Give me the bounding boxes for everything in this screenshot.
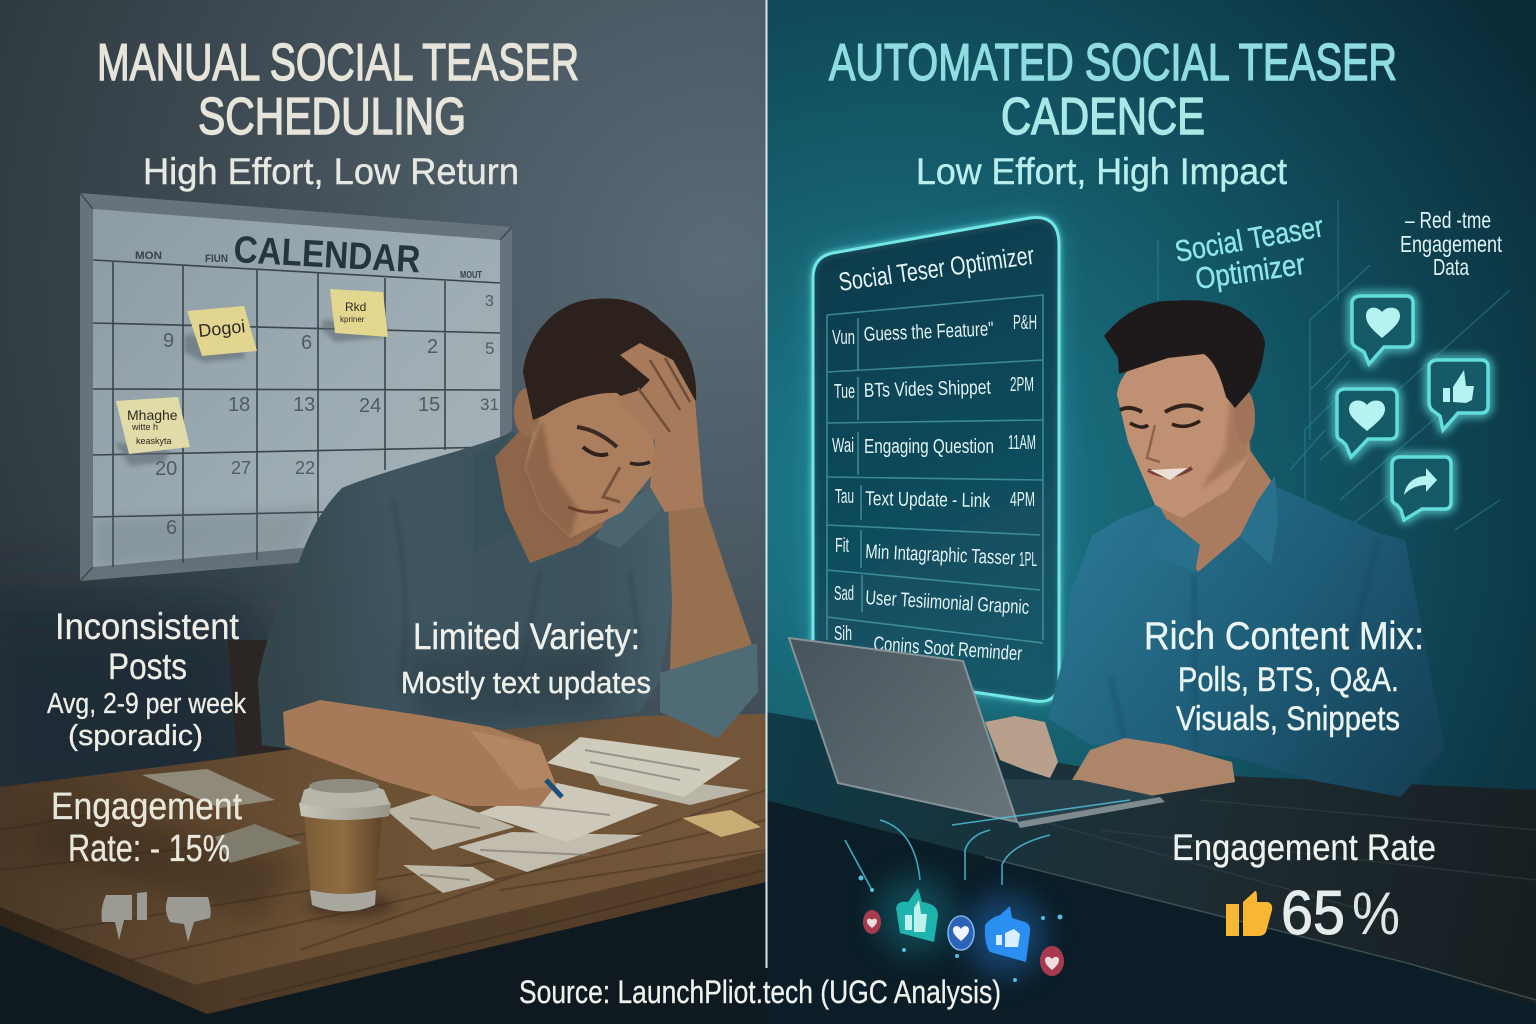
- stressed man: [258, 298, 758, 806]
- real-time data label: [1400, 207, 1502, 280]
- schedule rows: Min Intagraphic Tasser: [865, 541, 1016, 570]
- right hand: [1066, 738, 1235, 802]
- schedule rows: P&H: [1013, 312, 1037, 334]
- desk: [766, 712, 1536, 1024]
- wall calendar: FIUN: [205, 253, 228, 265]
- bubble: heart 2: [1337, 389, 1397, 457]
- sticky note: Dogoi: [187, 306, 257, 356]
- calendar dates: [155, 293, 499, 539]
- calendar title: CALENDAR: [232, 229, 422, 281]
- right collar: [595, 490, 670, 548]
- schedule rows: Vun: [832, 327, 855, 349]
- stat: rich content mix: Polls, BTS, Q&A.: [1178, 661, 1399, 699]
- stat: engagement rate automated: %: [1352, 880, 1400, 947]
- schedule rows: Text Update - Link: [865, 488, 991, 512]
- schedule rows: Sih: [834, 623, 852, 645]
- face details: [1120, 405, 1203, 480]
- wall calendar: [80, 193, 512, 581]
- schedule rows: BTs Vides Shippet: [864, 377, 991, 402]
- floating reactions: [845, 800, 1130, 982]
- ear: [1235, 390, 1255, 444]
- automated subtitle: Low Effort, High Impact: [916, 151, 1288, 192]
- stat: rich content mix: Visuals, Snippets: [1176, 700, 1400, 738]
- source line: Source: LaunchPliot.tech (UGC Analysis): [519, 974, 1001, 1010]
- stat: inconsistent posts: [47, 606, 246, 752]
- wall calendar: MON: [135, 250, 162, 262]
- calendar dates: 27: [231, 458, 251, 478]
- schedule rows: Tau: [835, 486, 854, 508]
- left collar: [473, 430, 530, 553]
- face details: [568, 427, 650, 512]
- rolled sleeve: [660, 643, 758, 738]
- optimizer label: [1172, 210, 1326, 296]
- real-time data label: – Red -tme: [1405, 207, 1491, 233]
- neck: [495, 420, 640, 563]
- reaction: blue thumbs up: [985, 906, 1030, 962]
- automated title: CADENCE: [1001, 88, 1205, 146]
- manual title: MANUAL SOCIAL TEASER: [97, 34, 579, 92]
- stat: engagement rate automated: 65: [1281, 879, 1345, 948]
- stat: rich content mix: Rich Content Mix:: [1144, 615, 1424, 658]
- calendar dates: 3: [485, 293, 494, 310]
- scattered papers: [142, 737, 761, 893]
- reaction: blue circle heart: [948, 916, 974, 950]
- engagement bubbles: [1337, 296, 1488, 520]
- schedule rows: 1PL: [1019, 549, 1037, 571]
- center divider: [766, 0, 768, 968]
- schedule rows: Engaging Question: [864, 436, 994, 458]
- schedule rows: 4PM: [1010, 489, 1035, 511]
- sticky note: Dogoi: Dogoi: [197, 316, 246, 341]
- hand on head: [617, 343, 704, 512]
- panel: manual scheduling: [0, 0, 766, 1024]
- shirt: [258, 432, 672, 750]
- collar: [1150, 476, 1278, 572]
- stat: engagement rate automated: Engagement Rate: [1172, 827, 1436, 868]
- schedule rows: User Tesiimonial Grapnic: [865, 587, 1030, 619]
- pen: [546, 780, 562, 797]
- real-time data label: Engagement: [1400, 231, 1502, 257]
- sticky note: Rkd: [330, 289, 388, 337]
- schedule rows: Sad: [834, 583, 854, 605]
- schedule rows: 2PM: [1010, 374, 1034, 396]
- writing arm: [283, 700, 556, 806]
- schedule rows: Guess the Feature": [863, 318, 994, 346]
- bubble: thumbs up: [1429, 360, 1488, 430]
- schedule rows: [832, 312, 1037, 665]
- sticky note: Mhaghe: Mhaghe: [127, 407, 178, 423]
- sticky note: Rkd: Rkd: [345, 300, 366, 314]
- reaction: teal thumbs up: [896, 888, 938, 942]
- hair: [523, 298, 696, 430]
- laptop: [789, 638, 1165, 828]
- stat: rich content mix: [1144, 615, 1424, 738]
- calendar dates: 22: [295, 458, 315, 478]
- stat: inconsistent posts: Inconsistent: [55, 606, 240, 647]
- icon: thumbs up: [1226, 891, 1272, 936]
- calendar dates: 13: [293, 394, 315, 416]
- optimizer label: Social Teaser: [1172, 210, 1326, 269]
- circuit lines: [1158, 200, 1510, 550]
- stat: limited variety: Mostly text updates: [401, 665, 651, 700]
- stat: inconsistent posts: Posts: [108, 646, 187, 687]
- ear: [514, 388, 540, 436]
- optimizer panel: [813, 218, 1059, 701]
- left hand: [985, 716, 1058, 778]
- head: [524, 380, 656, 538]
- sticky note: Mhaghe: witte h: [131, 422, 158, 432]
- smiling man: [985, 300, 1445, 802]
- neck: [1150, 450, 1272, 572]
- calendar dates: 5: [485, 339, 494, 358]
- reaction: red heart right: [1040, 946, 1064, 976]
- desk: [0, 714, 766, 1014]
- schedule rows: 11AM: [1008, 432, 1036, 454]
- calendar dates: 2: [427, 336, 438, 358]
- schedule rows: Tue: [834, 381, 855, 403]
- stat: inconsistent posts: (sporadic): [68, 720, 203, 752]
- automated title: [829, 34, 1397, 146]
- wall calendar: MOUT: [460, 270, 482, 281]
- coffee cup: [299, 779, 395, 917]
- chair: [228, 640, 300, 770]
- panel heading: Social Teser Optimizer: [837, 240, 1036, 297]
- stat: limited variety: [401, 616, 651, 700]
- calendar dates: 6: [301, 332, 312, 354]
- calendar dates: 15: [418, 394, 440, 416]
- sticky note: Mhaghe: keaskyta: [136, 436, 172, 446]
- left sleeve cuff: [258, 680, 285, 745]
- schedule rows: Wai: [832, 435, 854, 457]
- stat: inconsistent posts: Avg, 2-9 per week: [47, 688, 246, 720]
- calendar dates: 24: [359, 395, 381, 417]
- thumbs down icons: [102, 892, 211, 942]
- reaction: red heart left: [863, 910, 881, 934]
- stat: engagement rate manual: Engagement: [51, 786, 242, 828]
- bubble: share: [1392, 457, 1451, 520]
- forearm raised: [668, 500, 752, 672]
- stat: engagement rate manual: [51, 786, 242, 870]
- calendar dates: 18: [228, 394, 250, 416]
- calendar dates: 31: [480, 395, 499, 414]
- stat: limited variety: Limited Variety:: [413, 616, 640, 657]
- shirt: [1048, 470, 1445, 797]
- manual title: SCHEDULING: [198, 88, 466, 146]
- calendar dates: 9: [163, 330, 174, 352]
- real-time data label: Data: [1433, 254, 1469, 280]
- sticky note: Rkd: kpriner: [340, 315, 365, 324]
- manual subtitle: High Effort, Low Return: [143, 151, 519, 192]
- hair: [1104, 300, 1265, 408]
- schedule rows: Conins Soot Reminder: [873, 633, 1023, 665]
- stat: engagement rate automated: [1172, 827, 1436, 948]
- schedule rows: Fit: [835, 535, 849, 557]
- bubble: heart: [1352, 296, 1413, 364]
- stat: engagement rate manual: Rate: - 15%: [68, 828, 230, 870]
- head: [1117, 345, 1250, 518]
- optimizer label: Optimizer: [1193, 248, 1307, 296]
- calendar dates: 6: [166, 517, 177, 539]
- panel: automated cadence: [766, 0, 1536, 1024]
- manual title: [97, 34, 579, 146]
- calendar dates: 20: [155, 458, 177, 480]
- sticky note: Mhaghe: [116, 397, 190, 454]
